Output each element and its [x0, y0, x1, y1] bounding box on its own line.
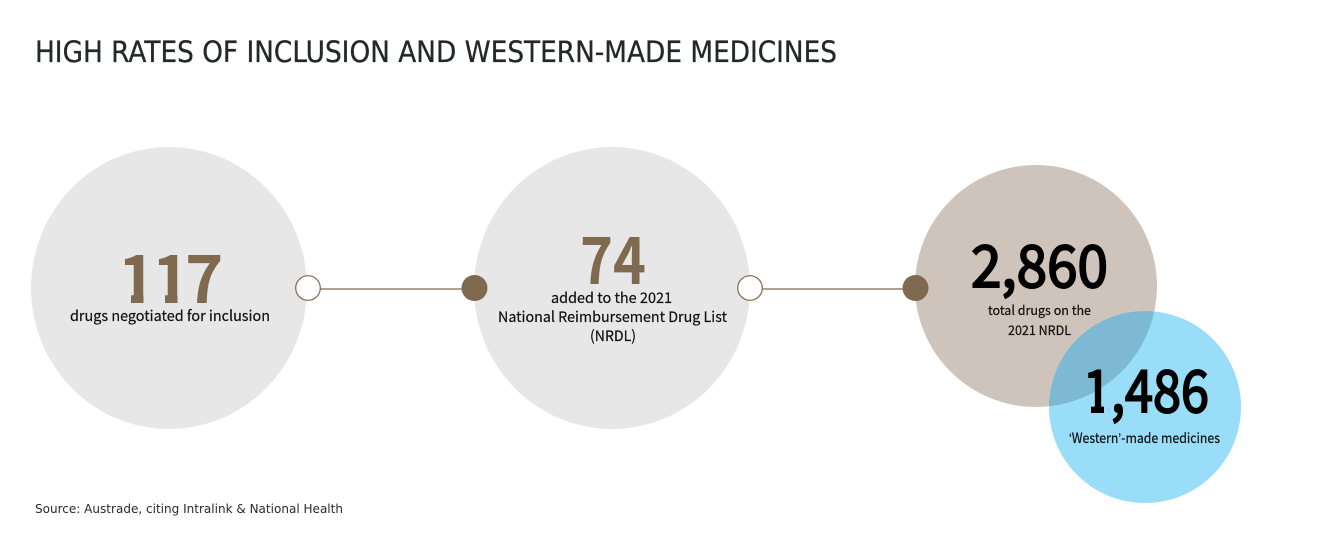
label: added to NRDL — [498, 287, 728, 346]
panel: 74 added to NRDL — [474, 147, 750, 429]
number: 2,860: 2,860 — [971, 220, 1108, 304]
panel: 117 drugs negotiated — [31, 147, 307, 429]
panel: 2,860 total drugs — [915, 165, 1157, 407]
label: added to NRDL: National Reimbursement Drug List — [498, 306, 728, 327]
label: added to NRDL: (NRDL) — [590, 325, 636, 346]
label: added to NRDL: added to the 2021 — [551, 287, 672, 308]
label: Western-made medicines: ‘Western’-made medicines — [1069, 428, 1220, 448]
panel: 1,486 Western-made medicines — [1049, 311, 1241, 503]
source note: Source: Austrade, citing Intralink & National Health — [35, 501, 343, 516]
label: drugs negotiated: drugs negotiated for inclusion — [70, 305, 270, 326]
connector: second to third circle — [738, 275, 928, 301]
number: 74: 74 — [580, 209, 646, 303]
connector: first to second circle — [296, 275, 488, 301]
label: total drugs: 2021 NRDL — [1008, 320, 1071, 339]
label: total drugs: total drugs on the — [988, 300, 1091, 319]
number: 117: 117 — [118, 228, 223, 322]
label: total drugs — [988, 300, 1091, 339]
number: 1,486: 1,486 — [1083, 345, 1209, 429]
title: HIGH RATES OF INCLUSION AND WESTERN-MADE MEDICINES — [35, 35, 837, 69]
